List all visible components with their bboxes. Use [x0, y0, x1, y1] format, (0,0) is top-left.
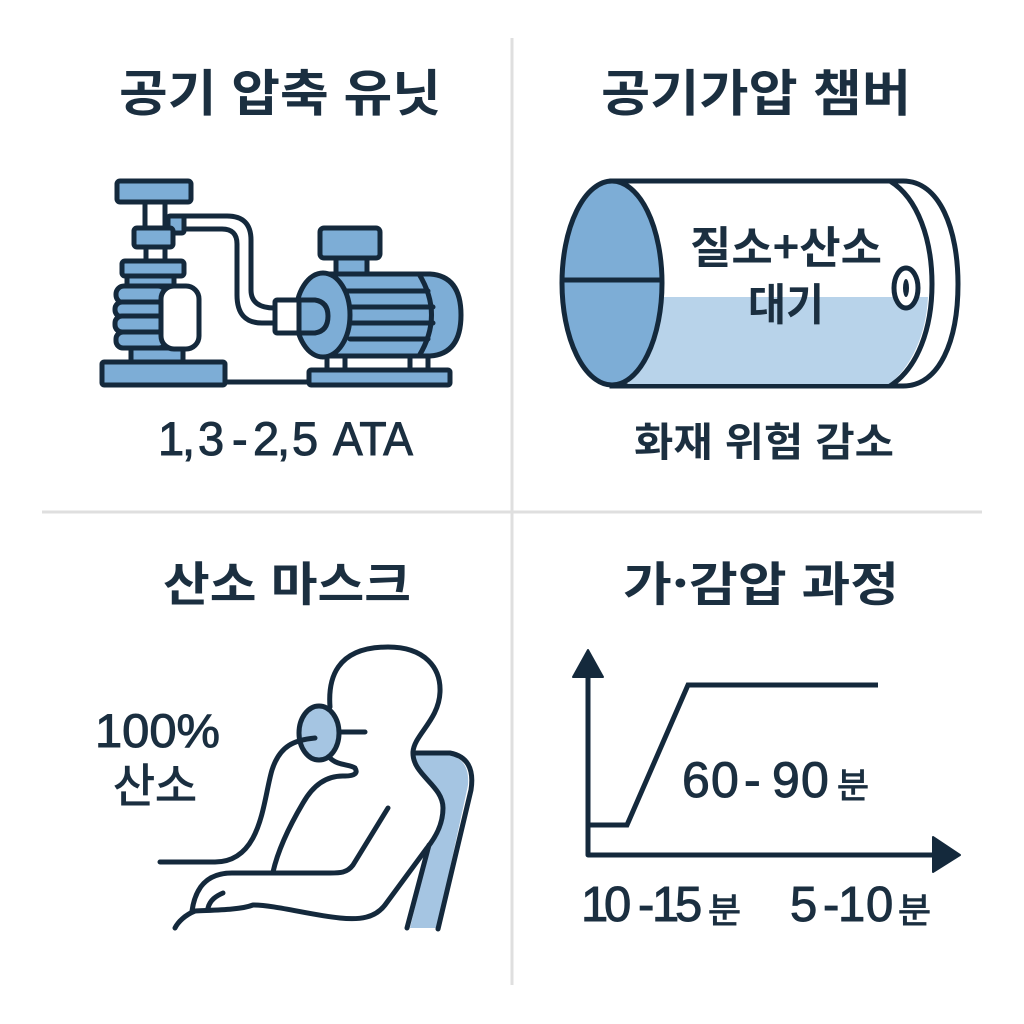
icon: seated person with mask [160, 647, 472, 929]
arm [192, 808, 388, 911]
oxygen tube [160, 738, 315, 862]
body [175, 647, 443, 928]
compressor [102, 181, 225, 385]
icon: chamber cylinder [562, 181, 958, 386]
title: oxygen mask: 산소 마스크 [163, 546, 411, 615]
label: pressure range [158, 412, 414, 465]
label: hold time: 60-90 [682, 752, 829, 808]
label: compression time: 10-15 [581, 878, 702, 932]
pipe [180, 216, 275, 323]
mask [299, 706, 365, 760]
label: decompression time: 5-10 [790, 878, 893, 932]
chamber end [562, 181, 662, 385]
chart: pressure profile [573, 650, 960, 872]
label: 100% oxygen [95, 704, 220, 816]
label: pressure range: 1,3-2,5 [158, 412, 318, 465]
label: pressure range: ATA [333, 412, 414, 465]
label: decompression time: 분 [898, 883, 931, 934]
title: air compression unit: 공기 압축 유닛 [119, 54, 441, 126]
chair [407, 753, 472, 929]
label: 100% oxygen: 100% [95, 704, 220, 757]
motor [225, 228, 461, 385]
label: nitrogen + oxygen air: 질소+산소 [690, 212, 882, 276]
title: air pressurisation chamber: 공기가압 챔버 [601, 54, 911, 126]
label: 100% oxygen: 산소 [113, 750, 197, 816]
chin and chest [273, 758, 356, 872]
axes [573, 650, 960, 872]
label: reduced fire risk: 화재 위험 감소 [634, 410, 894, 468]
label: hold time: 분 [837, 758, 869, 809]
pressure line [588, 685, 878, 825]
port [894, 268, 918, 308]
label: nitrogen + oxygen air: 대기 [748, 269, 824, 333]
label: nitrogen + oxygen air [690, 212, 882, 333]
title: compression and decompression process: 가·감압 과정 [623, 546, 899, 615]
icon: compressor and motor [102, 181, 461, 385]
label: compression time: 분 [708, 883, 741, 934]
